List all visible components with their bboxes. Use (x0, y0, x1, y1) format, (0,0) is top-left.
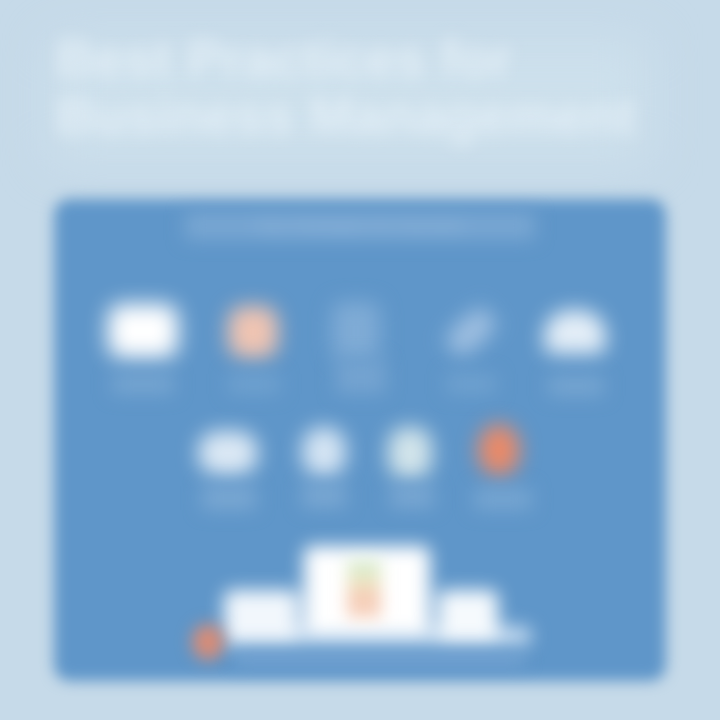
label: person (302, 484, 346, 508)
title: Best Practices for (56, 30, 512, 89)
centre monitor (304, 546, 430, 634)
icon: chat (198, 431, 258, 475)
label: tablet: Data (400, 486, 424, 498)
title background glow (50, 40, 650, 160)
label: cloud (548, 376, 604, 396)
title (56, 30, 636, 146)
right monitor (438, 590, 498, 642)
label: chat (202, 486, 256, 510)
label: orange circle (474, 488, 532, 510)
icon: cloud (544, 310, 606, 354)
label: envelope: Email (129, 374, 157, 386)
caption band (235, 654, 525, 666)
desk base (222, 626, 532, 646)
label: orange badge: Goals (240, 374, 268, 386)
icon: pencil (441, 303, 501, 361)
left monitor (224, 590, 298, 642)
icon: orange marker (192, 624, 224, 660)
label: envelope (112, 374, 174, 394)
label: document: Reports (342, 360, 380, 372)
title: Business Management (56, 87, 636, 146)
icon: document (332, 302, 380, 360)
panel: main (54, 199, 666, 681)
label: pencil: Plan (460, 374, 482, 386)
label: tablet (390, 486, 434, 508)
label: person: People (307, 484, 341, 496)
label: pencil (446, 374, 496, 394)
icon: orange circle (478, 424, 520, 476)
label: cloud: Cloud (562, 376, 590, 388)
panel heading (185, 212, 535, 240)
label: orange badge (228, 374, 280, 394)
panel heading: Key Strategies for Success (258, 216, 462, 235)
icon: tablet (388, 427, 432, 479)
label: chat: Teams (213, 486, 245, 498)
label: orange circle: Alerts (489, 488, 517, 500)
icon: orange badge (228, 306, 278, 358)
label: document (336, 360, 386, 394)
icon: person (302, 427, 346, 477)
chart: centre colours (347, 560, 381, 618)
icon: envelope (108, 304, 178, 358)
